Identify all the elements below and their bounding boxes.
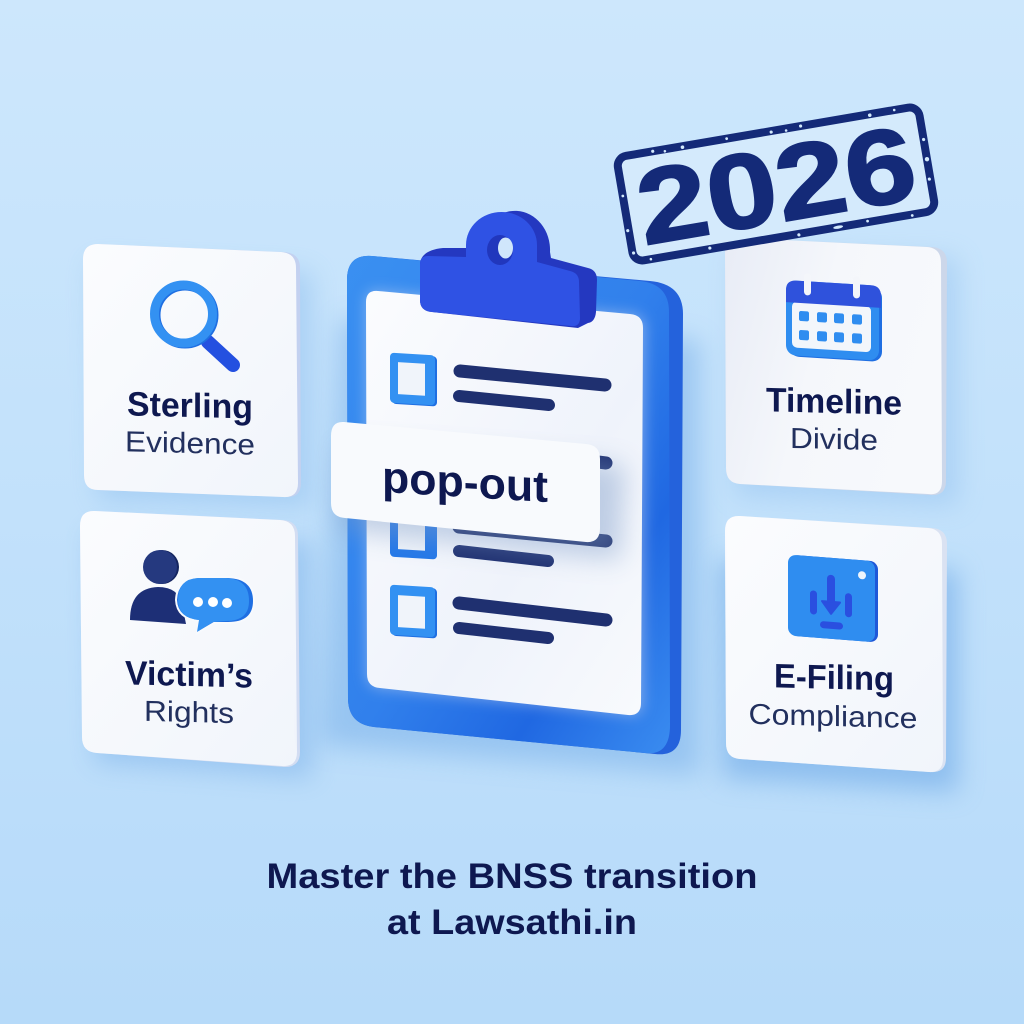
checklist row 2 hidden behind label <box>590 461 606 463</box>
text: Divide: Divide <box>790 423 878 457</box>
heading: Sterling: Sterling <box>127 385 253 427</box>
stamp: 2026 <box>613 102 939 270</box>
checklist row 4 <box>390 585 606 638</box>
stamp year: 2026 <box>628 104 924 268</box>
clipboard clip <box>420 211 597 328</box>
panel: Victim's Rights <box>80 511 312 778</box>
heading: Victim's: Victim’s <box>125 654 253 696</box>
heading: E-Filing: E-Filing <box>774 657 894 699</box>
icon: magnifying glass <box>154 285 233 365</box>
callout text: pop-out <box>382 453 548 512</box>
callout: pop-out <box>331 422 625 560</box>
footer line 2: at Lawsathi.in <box>387 903 637 942</box>
panel: Timeline Divide <box>725 238 958 505</box>
panel: E-Filing Compliance <box>718 516 958 792</box>
icon: person with speech bubble <box>130 550 254 633</box>
text: Compliance: Compliance <box>748 699 917 735</box>
heading: Timeline: Timeline <box>766 381 902 423</box>
checklist row 3 <box>390 509 606 561</box>
panel: Sterling Evidence <box>83 244 312 508</box>
text: Evidence: Evidence <box>125 426 255 462</box>
clipboard paper <box>366 291 645 715</box>
footer call to action <box>266 857 758 942</box>
text: Rights: Rights <box>144 696 234 730</box>
clipboard board <box>347 256 683 754</box>
icon: calendar <box>786 272 882 362</box>
icon: e-filing download screen <box>788 554 878 643</box>
footer line 1: Master the BNSS transition <box>266 857 758 896</box>
checklist row 1 <box>390 353 605 406</box>
clipboard <box>320 211 700 775</box>
